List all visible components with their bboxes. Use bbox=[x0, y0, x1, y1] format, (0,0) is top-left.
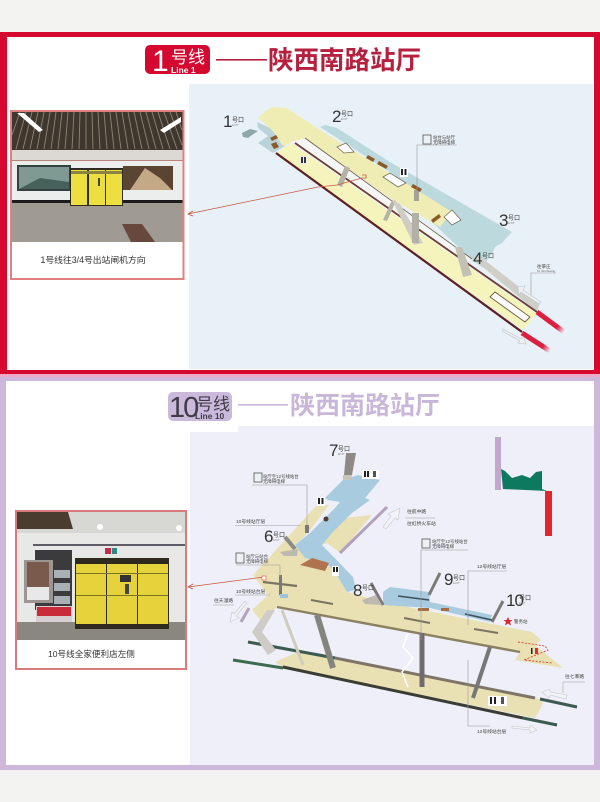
exit label 8: 8 bbox=[353, 581, 362, 600]
exit label 1: EXIT bbox=[232, 123, 239, 127]
exit label 9: 号口 bbox=[453, 575, 465, 582]
exit label 2: 号口 bbox=[341, 111, 353, 118]
photo: yellow lockers bbox=[75, 558, 169, 629]
label: line 10 platform level: 10号线站台层 bbox=[236, 588, 266, 595]
toilet icon left bbox=[317, 497, 325, 506]
exit label 6: EXIT bbox=[273, 538, 280, 542]
direction label Xinzhuang bbox=[531, 263, 556, 295]
exit label 1: 1 bbox=[223, 112, 232, 131]
label: line 12 hall level: 12号线站厅层 bbox=[477, 563, 507, 570]
callout: concourse elevator top bbox=[252, 473, 307, 525]
blue paid area bbox=[320, 125, 512, 267]
heading: line 10: 10 bbox=[169, 392, 198, 424]
photo: ceiling bbox=[17, 512, 185, 533]
heading: line 1: 1 bbox=[152, 45, 169, 78]
lower yellow platform bbox=[276, 143, 537, 330]
direction labels: 往天潼路 bbox=[214, 597, 233, 604]
exit label 2 bbox=[332, 107, 353, 126]
toilet icon mid bbox=[332, 566, 339, 576]
exit label 7: EXIT bbox=[338, 452, 345, 456]
upper yellow hall bbox=[258, 107, 452, 227]
label: line 12 hall level bbox=[468, 563, 507, 625]
photo: floor bbox=[17, 622, 185, 640]
heading: line 1 bbox=[145, 45, 421, 78]
label: line 10 hall level: 10号线站厅层 bbox=[236, 518, 266, 525]
direction labels: 往虹桥火车站 bbox=[407, 520, 436, 527]
exit label 8: 号口 bbox=[362, 585, 374, 592]
photo card: line 1 lockers bbox=[10, 110, 184, 280]
tracks bbox=[233, 642, 577, 725]
exit label 2: EXIT bbox=[341, 117, 348, 121]
callout: line 12 elevator bbox=[421, 538, 468, 640]
minimap bbox=[495, 437, 552, 536]
upper tan hall bbox=[252, 505, 563, 668]
heading: line 1: 陕西南路站厅 bbox=[268, 47, 421, 75]
exit label 4: 4 bbox=[473, 249, 482, 268]
direction arrows bbox=[518, 286, 541, 304]
heading: line 1: 号线 bbox=[171, 48, 205, 67]
exit label 8 bbox=[353, 581, 374, 600]
callout: concourse elevator top: 站厅至12号线站台 bbox=[263, 473, 299, 480]
map: line 1 station bbox=[188, 84, 593, 369]
exit label 3: 号口 bbox=[508, 215, 520, 222]
panel: line 1 station hall bbox=[0, 32, 600, 374]
exit label 7: 7 bbox=[329, 441, 338, 460]
locker location arrow bbox=[188, 576, 266, 589]
panel: line 10 station hall bbox=[0, 377, 600, 770]
gray tunnel strip bbox=[472, 255, 540, 312]
locker location arrow bbox=[188, 175, 366, 216]
label: line 12 platform level bbox=[468, 660, 507, 735]
callout: concourse elevator top: 无障碍电梯 bbox=[263, 478, 286, 485]
heading: line 1: Line 1 bbox=[171, 65, 196, 75]
direction label Xinzhuang: 往莘庄 bbox=[537, 263, 551, 270]
brown escalators bbox=[270, 135, 441, 223]
blue paid corridor bbox=[295, 475, 380, 592]
lower track bbox=[276, 153, 522, 332]
exit label 2: 2 bbox=[332, 107, 341, 126]
elevator callout: 无障碍电梯 bbox=[433, 139, 456, 146]
hall openings bbox=[337, 143, 354, 153]
callout: concourse elevator mid bbox=[236, 553, 280, 577]
direction labels bbox=[213, 508, 585, 693]
exit label 10: 号口 bbox=[519, 595, 531, 602]
purple tunnel bbox=[340, 507, 387, 553]
exit label 3: EXIT bbox=[508, 221, 515, 225]
exit label 9: 9 bbox=[444, 570, 453, 589]
caption: 1号线往3/4号出站闸机方向 bbox=[40, 254, 146, 265]
label: line 10 platform level bbox=[235, 588, 270, 595]
elevator callout: 站台与站厅 bbox=[433, 134, 456, 141]
label: line 12 platform level: 12号线站台层 bbox=[477, 728, 507, 735]
lower platform bbox=[275, 652, 543, 718]
brown escalator mass bbox=[300, 558, 329, 571]
exit label 10 bbox=[506, 591, 531, 610]
toilet icon top bbox=[362, 470, 379, 479]
exit label 1: 号口 bbox=[232, 117, 244, 124]
exit label 6: 号口 bbox=[273, 532, 285, 539]
hall lower edge bbox=[277, 607, 520, 652]
toilet icon platform bbox=[488, 696, 507, 706]
red guide route bbox=[518, 642, 552, 663]
blue lower hall bbox=[383, 587, 492, 622]
callout: line 12 elevator: 无障碍电梯 bbox=[432, 543, 455, 550]
hall structures bbox=[263, 516, 498, 633]
photo: posters bbox=[17, 165, 173, 191]
photo: yellow lockers bbox=[70, 168, 123, 206]
caption: 10号线全家便利店左侧 bbox=[48, 648, 135, 659]
callout: concourse elevator mid: 无障碍电梯 bbox=[246, 558, 269, 565]
photo: ceiling bbox=[12, 112, 182, 150]
heading: line 10: 号线 bbox=[196, 395, 230, 414]
callout: line 12 elevator: 站厅至12号线站台 bbox=[432, 538, 468, 545]
exit label 7 bbox=[329, 441, 350, 460]
direction arrows bbox=[230, 508, 567, 733]
direction labels: 往航中路 bbox=[407, 508, 426, 515]
divider strip bbox=[0, 374, 600, 377]
exit label 4: 号口 bbox=[482, 253, 494, 260]
photo: wall bbox=[12, 150, 182, 160]
toilet icon hall bbox=[400, 168, 408, 177]
exit 1 entrance area bbox=[257, 122, 285, 153]
white void strip bbox=[291, 138, 472, 264]
heading: line 10 bbox=[168, 392, 440, 424]
star: police station: 警务站 bbox=[514, 618, 528, 625]
label: line 10 hall level bbox=[235, 518, 300, 526]
exit label 9 bbox=[444, 570, 465, 589]
exit label 3: 3 bbox=[499, 211, 508, 230]
exit label 3 bbox=[499, 211, 520, 230]
pillars bbox=[337, 166, 350, 187]
map: line 10 station bbox=[188, 426, 594, 765]
exit label 1 bbox=[223, 112, 244, 131]
direction label Xinzhuang: To Xinzhuang bbox=[537, 269, 556, 273]
exit label 4 bbox=[473, 249, 494, 268]
upper track bbox=[295, 143, 537, 312]
exit label 6 bbox=[264, 527, 285, 546]
photo: wall bbox=[17, 533, 185, 622]
direction labels: 往七莘路 bbox=[565, 673, 584, 680]
red tunnels bbox=[537, 312, 564, 332]
exit label 7: 号口 bbox=[338, 446, 350, 453]
exit label 10: EXIT bbox=[519, 601, 526, 605]
photo: signage bbox=[24, 548, 117, 622]
elevator callout bbox=[417, 134, 457, 190]
star: police station bbox=[504, 617, 528, 626]
toilet icon bbox=[300, 156, 307, 164]
heading: line 10: Line 10 bbox=[195, 411, 225, 421]
callout: concourse elevator mid: 站厅与站台 bbox=[246, 553, 269, 560]
escalators to exits bbox=[280, 453, 503, 622]
photo card: line 10 lockers bbox=[15, 510, 187, 670]
exit label 10: 10 bbox=[506, 591, 523, 610]
tan wedge bbox=[322, 515, 372, 553]
photo: floor bbox=[12, 203, 182, 242]
heading: line 10: 陕西南路站厅 bbox=[290, 392, 440, 420]
exit label 9: EXIT bbox=[453, 581, 460, 585]
exit label 6: 6 bbox=[264, 527, 273, 546]
pillars and stairs bbox=[252, 610, 490, 698]
